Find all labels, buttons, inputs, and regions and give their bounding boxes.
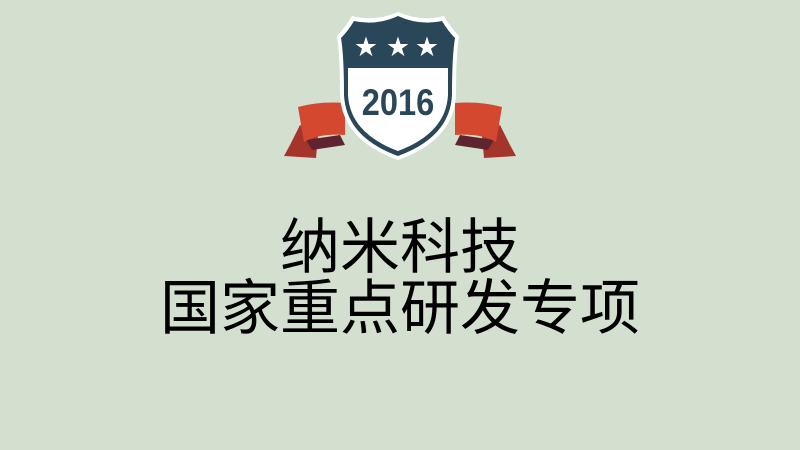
title line 2: 国家重点研发专项	[160, 275, 640, 342]
stars: ★	[386, 32, 410, 63]
stars	[354, 32, 439, 63]
stars: ★	[415, 32, 439, 63]
ribbon	[284, 102, 516, 158]
title line 1: 纳米科技	[280, 214, 520, 281]
year: 2016	[362, 82, 434, 123]
stars: ★	[354, 32, 378, 63]
shield	[337, 12, 459, 160]
